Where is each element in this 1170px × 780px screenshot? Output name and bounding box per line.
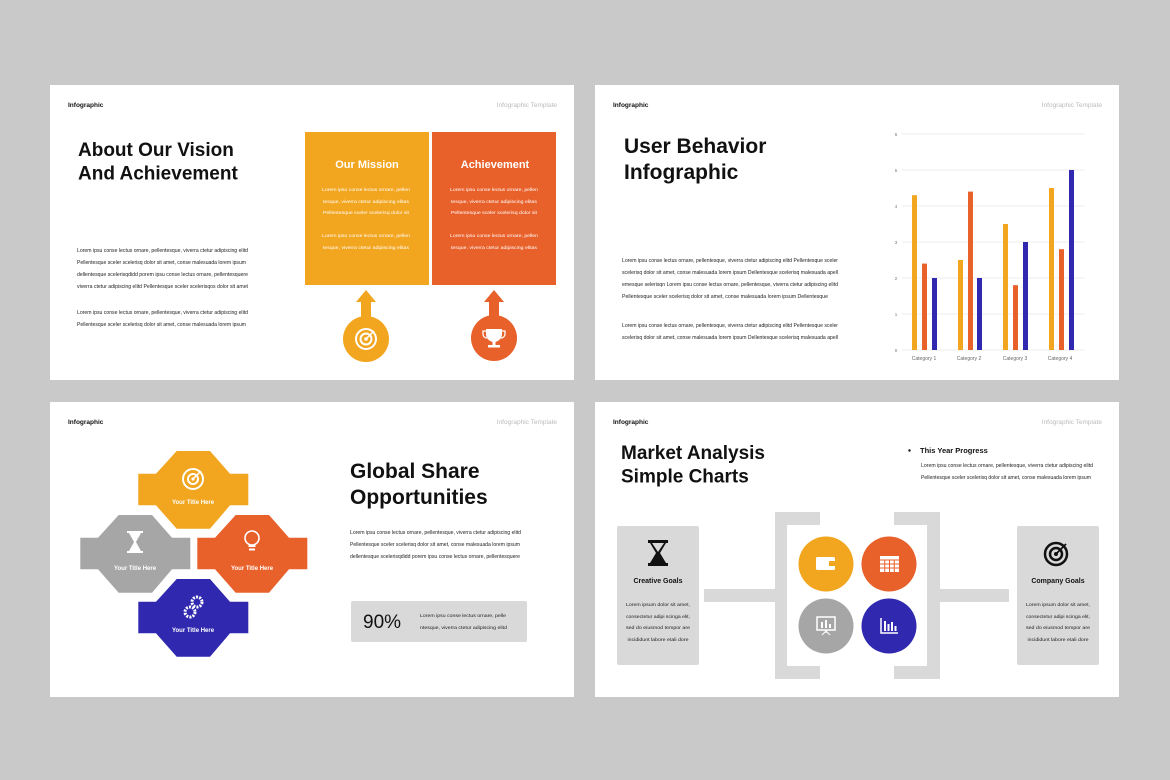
progress text block: This Year Progress [920,446,988,455]
title: Global Share [350,460,480,483]
body text: Pellentesque sceler scelerisq dolor sit amet, conse malesuada lorem ipsum [350,542,520,548]
progress text block: Lorem ipsu conse lectus ornare, pellentesque, viverra ctetur adipiscing elitd [921,463,1093,469]
shape: gray hourglass: Your Title Here [114,566,157,572]
header label: Infographic [68,102,104,109]
card: achievement: tesque, viverra ctetur adipiscing elitas [451,245,538,250]
card: company goals: Company Goals [1031,578,1085,585]
card: company goals [1017,526,1099,665]
bar chart: Category 1 [912,356,936,362]
card: creative goals: Lorem ipsum dolor sit amet, [626,602,690,608]
icon: target arrow circle [343,290,389,362]
card: achievement: Pellentesque sceler scelerisq dolor sit [451,210,538,215]
card: creative goals: sed do eiusmod tempor are [626,625,690,631]
icon: calendar circle [862,536,916,592]
card: company goals: consectetur adipi scinga elit, [1026,614,1090,620]
body text: Pellentesque sceler scelerisq dolor sit amet, conse malesuada lorem ipsum Dellentesque [622,294,828,300]
body text: Lorem ipsu conse lectus ornare, pellentesque, viverra ctetur adipiscing elitd Pellentesque sceler [622,258,838,264]
body text [622,258,838,341]
body text: Lorem ipsu conse lectus ornare, pellentesque, viverra ctetur adipiscing elitd [77,248,248,254]
header template label: Infographic Template [1042,102,1102,109]
bar chart: 1 [895,312,898,317]
body text [350,530,521,560]
card: our mission: Lorem ipsu conse lectus ornare, pellen [322,187,411,192]
body text: Pellentesque sceler scelerisq dolor sit amet, conse malesuada lorem ipsum [77,260,246,266]
panel: global share slide [50,402,574,697]
card: achievement: Lorem ipsu conse lectus ornare, pellen [450,187,539,192]
bar chart: 6 [895,132,898,137]
icon: wallet circle [798,536,854,592]
card: our mission: tesque, viverra ctetur adipiscing elitas [323,199,410,204]
icon: trophy arrow circle [471,290,517,361]
body text: Lorem ipsu conse lectus ornare, pellentesque, viverra ctetur adipiscing elitd Pellentesque sceler [622,323,838,329]
body text: dellentesque scelerisqdidd porem ipsu conse lectus ornare, pellentesquere [350,554,520,560]
body text: scelerisq dolor sit amet, conse malesuada lorem ipsum Dellentesque scelerisq malesuada apell [622,335,838,341]
card: creative goals: consectetur adipi scinga elit, [626,614,690,620]
shape: yellow target [138,451,248,529]
body text: emesque selerisqn Lorem ipsu conse lectus ornare, pellentesque, viverra ctetur adipiscing elitd [622,282,838,288]
card: creative goals [617,526,699,665]
progress text block [908,446,1093,481]
header label: Infographic [613,419,649,426]
card: our mission [305,132,429,285]
card: our mission: Our Mission [335,159,399,171]
shape: blue gears [138,579,248,657]
body text [77,248,249,328]
header template label: Infographic Template [497,419,557,426]
title: Market Analysis [621,443,765,464]
bar chart: Category 2 [957,356,981,362]
title: Simple Charts [621,466,749,488]
body text: viverra ctetur adipiscing elitd Pellentesque sceler scelerisqos dolor sit amet [77,284,249,290]
card: company goals: Lorem ipsum dolor sit amet, [1026,602,1090,608]
panel: market analysis slide [595,402,1119,697]
panel: vision and achievement slide [50,85,574,380]
stat box: 90%: ntesque, viverra ctetur adipiscing elitd [420,625,507,631]
title: About Our Vision [78,140,234,161]
title: Infographic [624,161,739,184]
icon: bar chart circle [862,598,916,654]
card: achievement [432,132,556,285]
bar chart: Category 4 [1048,356,1072,362]
shape: blue gears: Your Title Here [172,628,215,634]
header template label: Infographic Template [1042,419,1102,426]
header label: Infographic [68,419,104,426]
stat box: 90% [351,601,527,642]
bar chart: 0 [895,348,898,353]
bar chart: Category 3 [1003,356,1027,362]
stat box: 90%: Lorem ipsu conse lectus ornare, pelle [420,613,506,619]
card: achievement: Achievement [461,159,530,171]
bar chart [895,132,1085,362]
body text: Pellentesque sceler scelerisq dolor sit amet, conse malesuada lorem ipsum [77,322,246,328]
bar chart: 4 [895,204,898,209]
bar chart: 5 [895,168,898,173]
progress text block: Pellentesque sceler scelerisq dolor sit amet, conse malesuada lorem ipsum [921,475,1091,481]
header label: Infographic [613,102,649,109]
shape: orange lightbulb [197,515,307,593]
body text: Lorem ipsu conse lectus ornare, pellentesque, viverra ctetur adipiscing elitd [350,530,521,536]
bar chart: 2 [895,276,898,281]
card: creative goals: Creative Goals [633,578,683,585]
card: company goals: sed do eiusmod tempor are [1026,625,1090,631]
shape: gray hourglass [80,515,190,593]
body text: dellentesque scelerisqdidd porem ipsu conse lectus ornare, pellentesquere [77,272,248,278]
card: achievement: Lorem ipsu conse lectus ornare, pellen [450,233,539,238]
body text: scelerisq dolor sit amet, conse malesuada lorem ipsum Dellentesque scelerisq malesuada apell [622,270,838,276]
card: company goals: incididunt labore etali dore [1028,637,1089,643]
stat box: 90%: 90% [363,612,401,633]
shape: orange lightbulb: Your Title Here [231,566,274,572]
panel: user behavior slide [595,85,1119,380]
card: our mission: tesque, viverra ctetur adipiscing elitas [323,245,410,250]
title: And Achievement [78,164,238,184]
title: User Behavior [624,135,766,158]
body text: Lorem ipsu conse lectus ornare, pellentesque, viverra ctetur adipiscing elitd [77,310,248,316]
card: our mission: Pellentesque sceler scelerisq dolor sit [323,210,410,215]
card: our mission: Lorem ipsu conse lectus ornare, pellen [322,233,411,238]
card: creative goals: incididunt labore etali dore [628,637,689,643]
card: achievement: tesque, viverra ctetur adipiscing elitas [451,199,538,204]
connectors and brackets [704,512,1009,679]
bar chart: 3 [895,240,898,245]
header template label: Infographic Template [497,102,557,109]
title: Opportunities [350,486,488,509]
icon: presentation circle [798,598,854,654]
shape: yellow target: Your Title Here [172,500,215,506]
